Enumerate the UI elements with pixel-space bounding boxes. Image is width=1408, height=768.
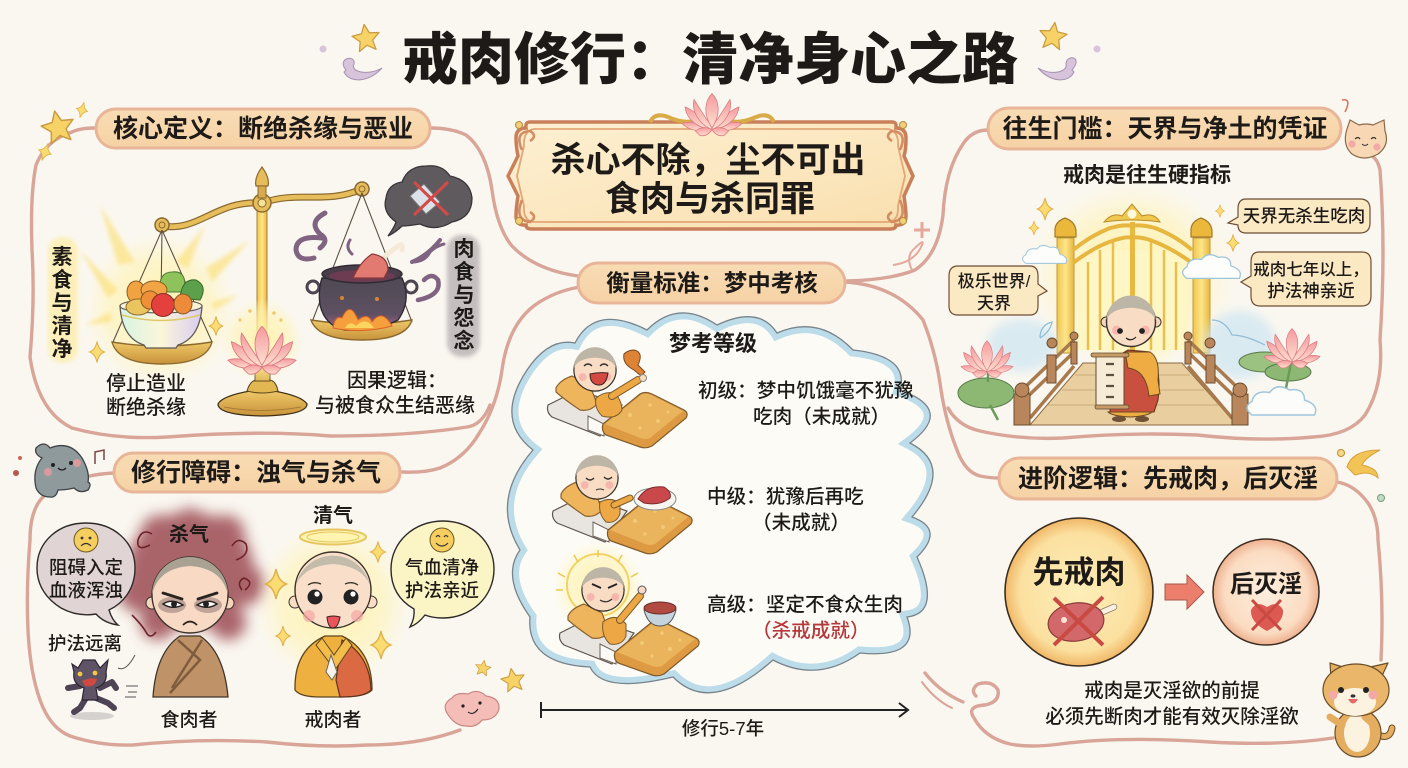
heading pill: core definition [96,109,430,148]
heading pill: measure standard [578,263,845,303]
plaque gold scrolls and lotus [650,94,774,136]
speech bubble: no killing in heaven [1228,199,1370,233]
panel: advanced logic [999,450,1392,757]
bridge [1014,332,1248,425]
text: pure qi: 清气 [313,504,353,527]
heading pill: rebirth: 往生门槛：天界与净土的凭证 [1002,115,1328,143]
caption: 必须先断肉才能有效灭除淫欲 [1045,706,1299,728]
central motto plaque [508,94,913,229]
golden gate [1055,204,1212,353]
glow: pure qi [253,523,413,683]
heading pill: advanced logic: 进阶逻辑：先戒肉，后灭淫 [1018,465,1318,493]
speech bubble: pure blood [391,521,494,627]
bed scene: level 1 [548,347,687,448]
caption: causal logic: 因果逻辑： [347,369,447,392]
label: meat eater: 食肉者 [160,709,218,731]
label: vegetarian and purity: 与 [52,292,72,315]
caption: 戒肉是灭淫欲的前提 [1084,680,1260,702]
decoration: pink sparkle near plaque [893,222,930,270]
panel: core definition [36,101,480,419]
thought cloud [507,313,933,693]
lotus flowers and leaves [958,329,1320,420]
text: level 3 [707,594,903,642]
icon: pink cloud mascot with stars [445,659,526,726]
label: meat and resentment: 念 [454,329,474,353]
subheading: 戒肉是往生硬指标 [1063,164,1231,187]
label: protectors leave: 护法远离 [48,633,122,654]
monk holding scroll [1091,295,1161,422]
panel: practice obstacles [13,444,526,731]
speech bubble: obstruct meditation [37,523,135,625]
icon: cat head [1342,100,1386,158]
caption: causal logic: 与被食众生结恶缘 [315,394,475,417]
label: meat and resentment: 怨 [454,307,474,330]
central motto plaque: 食肉与杀同罪 [605,180,815,219]
speech bubble: pure land: 极乐世界/ [958,272,1031,291]
caption: stop karma: 停止造业 [106,372,186,395]
speech bubble: pure blood: 护法亲近 [405,580,479,601]
killing aura [118,508,265,640]
bed scene: level 3 [552,541,699,676]
text: level 3: 高级：坚定不食众生肉 [707,594,903,616]
text: level 2: 中级：犹豫后再吃 [707,486,864,508]
scale [113,167,412,416]
text: level 2: （未成就） [752,512,850,534]
label: meat and resentment: 食 [454,260,474,284]
panel: dream test standard [507,263,933,739]
label: timeline: 修行5-7年 [682,718,764,739]
icon: grey ghost mascot [13,444,104,497]
icon: resentment wisps [296,213,444,300]
heading pill: measure standard: 衡量标准：梦中考核 [606,270,818,296]
icon: running devil [68,655,138,720]
label: meat and resentment: 肉 [454,238,474,261]
label: abstainer: 戒肉者 [304,709,362,731]
icon: orange cat mascot [1323,663,1392,757]
panel outlines [27,128,1383,746]
panel: rebirth threshold [949,100,1386,425]
circle: then end lust: 后灭淫 [1230,571,1302,598]
speech bubble: seven years: 护法神亲近 [1267,281,1355,301]
icon: stars [36,101,89,163]
arrow: practice timeline [541,702,908,718]
meat eater monk [146,557,234,697]
glow: rays around vegetables [80,205,250,388]
speech bubble: seven years: 戒肉七年以上， [1253,260,1369,279]
label: vegetarian and purity: 清 [52,315,72,338]
glow behind gate [1027,180,1237,380]
text: level 1: 初级：梦中饥饿毫不犹豫 [698,380,914,402]
text: level 1 [698,380,914,428]
speech bubble: pure land: 天界 [977,294,1011,313]
caption: stop karma [106,372,186,419]
icon: crossed meat [1046,597,1114,645]
icon: crossed heart [1251,600,1283,631]
circle: abstain meat first [1005,518,1153,666]
icon: title ornaments right [1038,21,1100,80]
abstaining monk [289,552,377,697]
caption: causal logic [315,369,475,417]
title: 戒肉修行：清净身心之路 [402,28,1018,91]
speech bubble: pure land [949,266,1047,315]
label: vegetarian and purity [48,237,78,363]
motto text: 杀心不除，尘不可出 [550,141,866,180]
heading pill: rebirth [988,108,1341,149]
speech bubble: pure blood: 气血清净 [405,557,479,578]
heading pill: core definition: 核心定义：断绝杀缘与恶业 [113,115,413,143]
left pan with vegetable bowl [90,272,223,364]
icon: sparkles around monk [266,542,391,659]
label: meat and resentment: 与 [454,284,474,307]
label: meat and resentment [447,235,480,357]
icon: swirl decoration [1338,450,1384,502]
label: vegetarian and purity: 食 [52,268,72,292]
icon: lotus on scale [220,298,304,382]
circle: abstain meat first: 先戒肉 [1032,555,1126,590]
speech bubble: obstruct meditation: 血液浑浊 [49,580,123,601]
icon: title ornaments left [320,23,382,80]
caption: stop karma: 断绝杀缘 [106,396,186,419]
text: killing qi: 杀气 [169,523,209,546]
heading: dream levels: 梦考等级 [669,331,757,356]
icon: dark cloud with crossed cleaver [385,166,472,236]
heading pill: advanced logic [999,458,1337,499]
heading pill: obstacles [114,453,400,492]
text: level 3: （杀戒成就） [752,620,870,642]
label: vegetarian and purity: 净 [52,338,72,361]
text: level 2 [707,486,864,534]
text: level 1: 吃肉（未成就） [753,406,890,428]
speech bubble: no killing in heaven: 天界无杀生吃肉 [1243,206,1365,226]
heading pill: obstacles: 修行障碍：浊气与杀气 [131,459,381,487]
right pan with meat pot [307,245,417,340]
label: vegetarian and purity: 素 [52,246,72,269]
speech bubble: obstruct meditation: 阻碍入定 [49,557,123,578]
circle: then end lust [1213,539,1319,645]
speech bubble: seven years [1241,252,1371,306]
caption [1045,680,1299,728]
clouds and sparkles [987,198,1276,379]
arrow: then [1165,575,1204,609]
bed scene: level 2 [552,455,692,554]
